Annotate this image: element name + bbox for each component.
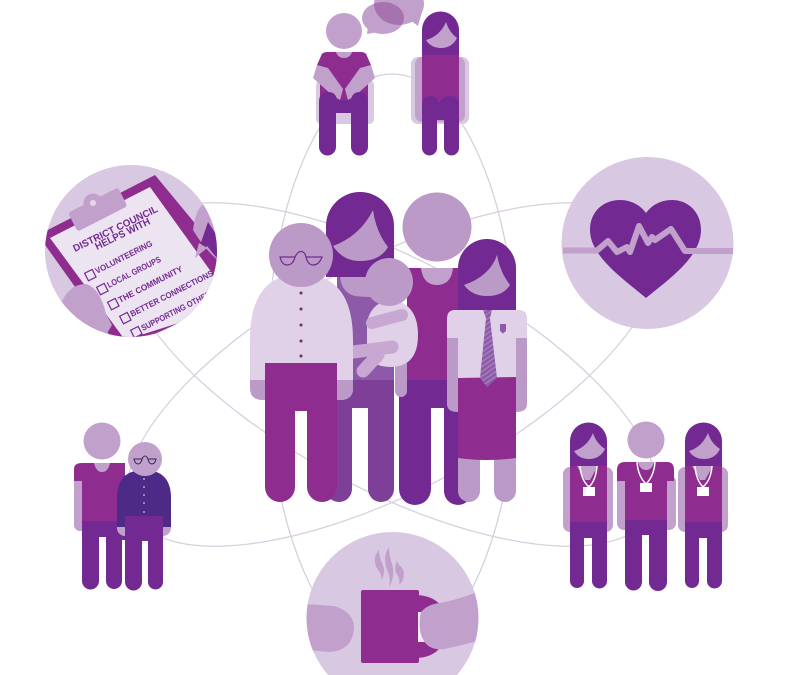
figure: mother [326, 192, 407, 502]
panel: clipboard circle [45, 165, 217, 337]
icon: speech bubbles [362, 0, 424, 34]
icon: heart [590, 200, 701, 298]
icon: striped tie [480, 310, 497, 387]
panel: mug circle [305, 532, 482, 675]
icon: mug body [361, 590, 419, 663]
figure: seated man [313, 13, 375, 156]
figures: two people, left [74, 422, 171, 590]
figure: father [399, 192, 472, 505]
icon: clipboard board [45, 175, 217, 337]
figure: seated woman [411, 12, 469, 156]
figure: baby [353, 258, 418, 371]
checklist: BETTER CONNECTIONS [128, 268, 215, 319]
icon: right hand [420, 590, 482, 649]
icon: steam [375, 547, 404, 587]
icon: hand behind clipboard [62, 284, 112, 334]
heading: clipboard title: HELPS WITH [93, 217, 152, 253]
figures: central family [250, 192, 527, 505]
icon: clipboard paper [50, 187, 214, 337]
panel: heart circle [562, 157, 734, 329]
icon: hand holding pen [193, 204, 217, 259]
checklist: THE COMMUNITY [116, 263, 184, 305]
checklist [85, 238, 217, 338]
checklist: LOCAL GROUPS [105, 254, 163, 290]
checklist: SUPPORTING OTHERS [139, 287, 217, 333]
figure: grandfather [250, 223, 353, 502]
figures: seated conversation [313, 0, 469, 156]
icon: left hand [305, 604, 354, 652]
figure: older man with glasses [117, 442, 171, 590]
icon: pulse line [563, 226, 733, 252]
icon: mug handle [419, 595, 439, 658]
checklist: VOLUNTEERING [93, 238, 154, 276]
icon: clipboard clip [68, 187, 127, 232]
icon: badge [500, 324, 506, 334]
figure: man [74, 422, 130, 590]
figure: staff woman left [563, 423, 613, 588]
figures: three staff members, right [563, 422, 728, 591]
figure: staff woman right [678, 423, 728, 588]
figure: daughter in uniform [447, 239, 527, 502]
heading: clipboard title: DISTRICT COUNCIL [71, 204, 160, 255]
figure: staff man centre [617, 422, 676, 591]
